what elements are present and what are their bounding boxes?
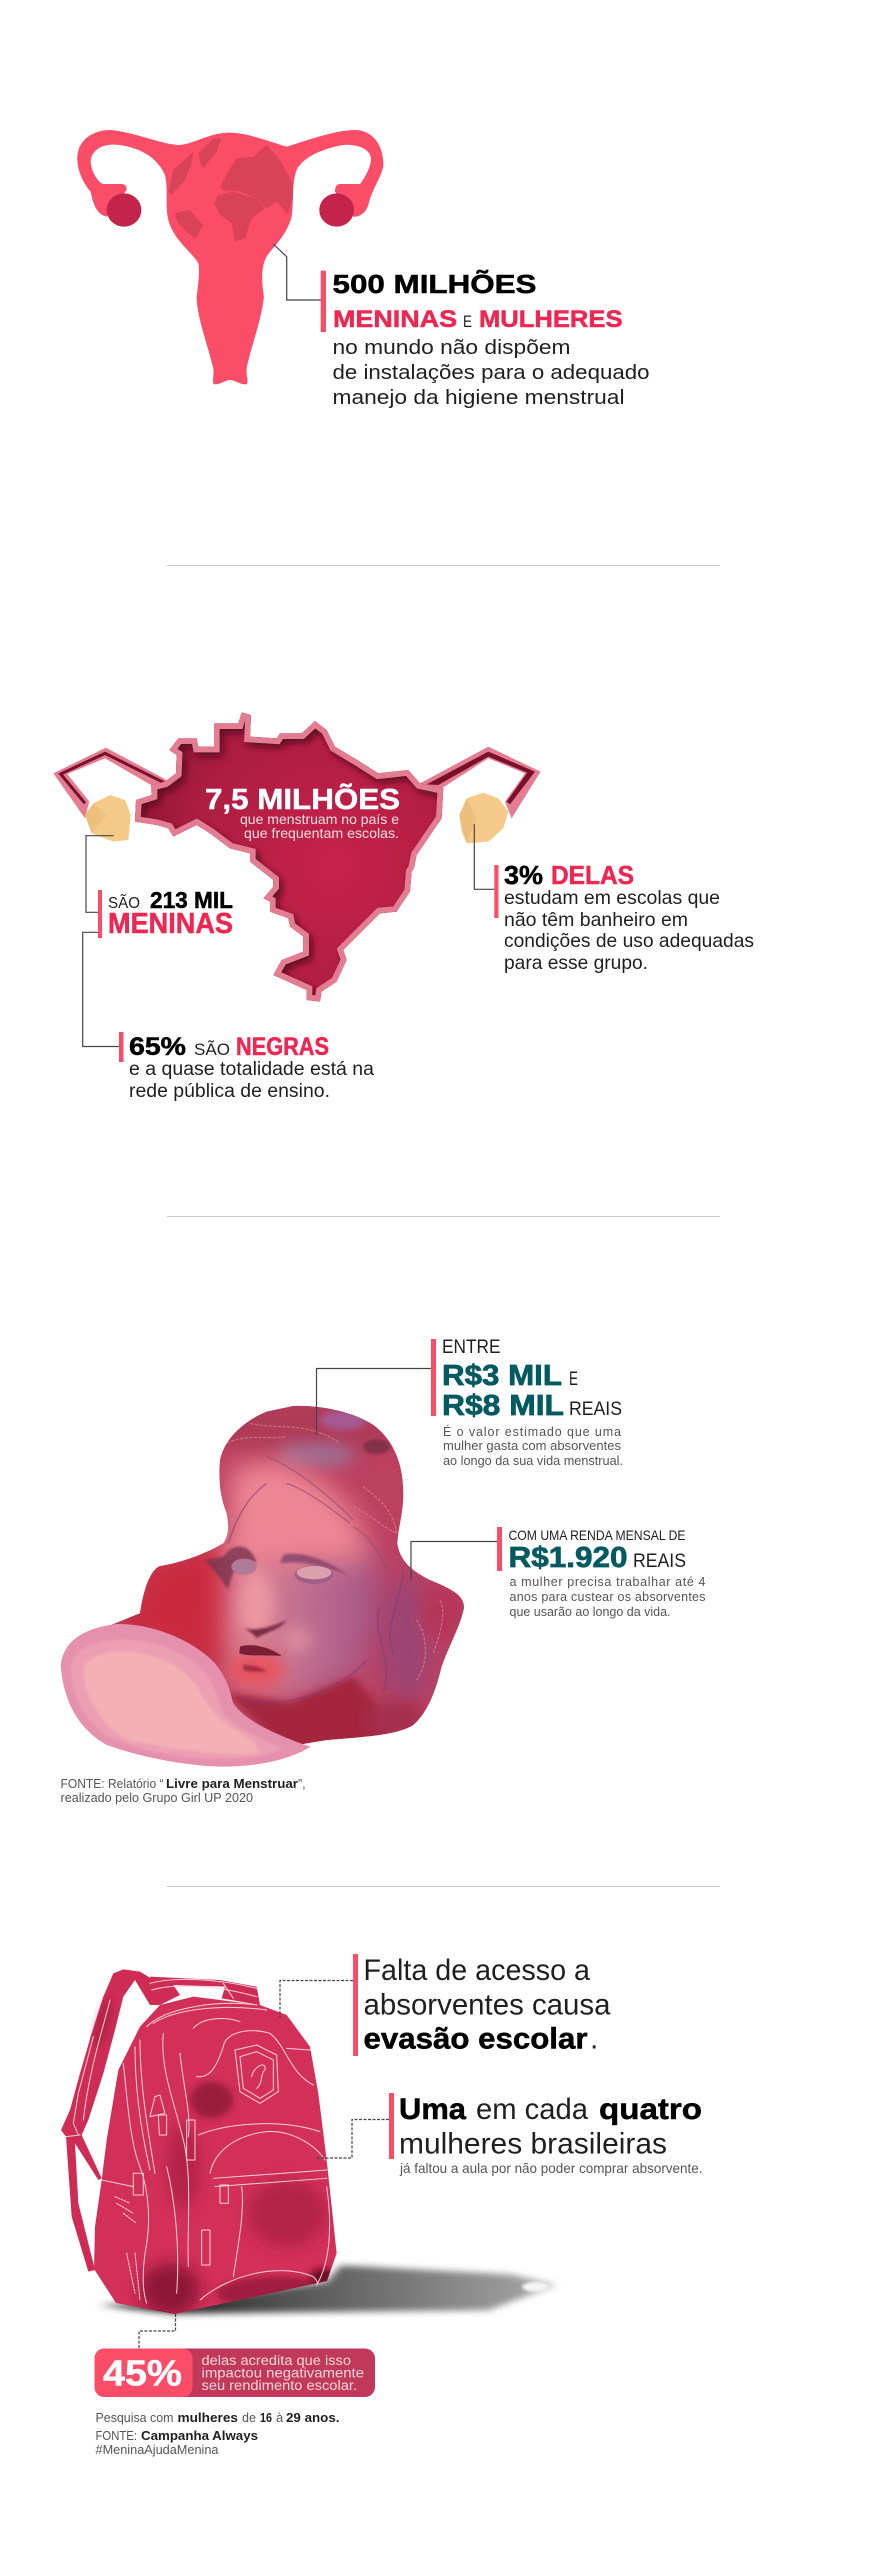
source note: FONTE: (96, 2428, 137, 2443)
callout: R$3 mil e R$8 mil: R$3 MIL (442, 1360, 562, 1392)
statement: evasão escolar: evasão escolar (364, 2022, 588, 2056)
statement: uma em cada quatro: já faltou a aula por não poder comprar absorvente. (399, 2160, 702, 2176)
panel: Brasil 7,5 milhões (53, 712, 754, 1102)
source note: 29 anos. (286, 2410, 340, 2425)
callout: R$3 mil e R$8 mil: REAIS (569, 1399, 622, 1420)
statement: evasão escolar (364, 1954, 611, 2056)
heading: meninas e mulheres: MULHERES (479, 306, 622, 333)
source note: mulheres (178, 2410, 238, 2425)
source note (60, 1777, 306, 1805)
callout: 65% negras: 65% (129, 1033, 186, 1061)
source note: Livre para Menstruar (166, 1777, 298, 1791)
statement: evasão escolar: Falta de acesso a (364, 1954, 590, 1987)
callout: 3% delas: estudam em escolas que (504, 887, 720, 909)
statement: uma em cada quatro: mulheres brasileiras (399, 2128, 667, 2160)
callout: 65% negras: rede pública de ensino. (129, 1081, 330, 1102)
illustration: backpack shadow (98, 2265, 556, 2314)
text block: no mundo: manejo da higiene menstrual (332, 387, 624, 409)
text: que menstruam: que frequentam escolas. (244, 825, 399, 841)
accent bar (389, 2093, 394, 2159)
callout: 213 mil meninas (108, 887, 233, 940)
text block: no mundo: de instalações para o adequado (332, 362, 650, 384)
illustration: banknote bust (107, 1400, 473, 1750)
callout: R$3 mil e R$8 mil (442, 1337, 623, 1468)
callout: R$3 mil e R$8 mil: É o valor estimado que uma (443, 1424, 621, 1439)
callout: 3% delas: condições de uso adequadas (504, 930, 754, 952)
connector lines left (83, 836, 119, 1046)
callout: 45%: seu rendimento escolar. (202, 2378, 357, 2393)
statement: uma em cada quatro: Uma (399, 2093, 466, 2126)
connector dashed lines (139, 1980, 389, 2348)
heading: 500 milhões: 500 MILHÕES (332, 269, 536, 299)
panel: custo dos absorventes (60, 1337, 706, 1805)
accent bar (353, 1954, 358, 2056)
callout: R$1.920 (508, 1527, 706, 1619)
callout: 45%: delas acredita que isso (202, 2353, 351, 2368)
connector line right (411, 1542, 497, 1580)
callout: 213 mil meninas: MENINAS (108, 908, 233, 940)
accent bar (321, 271, 326, 332)
accent bar (494, 865, 498, 918)
callout: 45%: 45% (103, 2352, 182, 2394)
illustration: Brazil map as uterus (53, 712, 541, 1006)
callout: 213 mil meninas: SÃO (108, 892, 140, 912)
callout: R$3 mil e R$8 mil: mulher gasta com absorventes (443, 1439, 621, 1453)
connector line top (316, 1368, 431, 1435)
accent bar (497, 1527, 502, 1571)
panel: 500 milhões (77, 130, 650, 409)
callout: 45% (94, 2348, 375, 2397)
text: que menstruam (240, 811, 399, 841)
text block: no mundo: no mundo não dispõem (332, 337, 570, 359)
heading: meninas e mulheres (333, 306, 622, 333)
callout: R$3 mil e R$8 mil: E (569, 1369, 578, 1390)
source note: Campanha Always (141, 2428, 258, 2443)
accent bar (98, 890, 102, 938)
callout: 45%: impactou negativamente (202, 2366, 364, 2381)
source note: Pesquisa com (96, 2410, 174, 2425)
callout: R$1.920: que usarão ao longo da vida. (510, 1605, 670, 1619)
source note (96, 2410, 340, 2457)
statement: evasão escolar: . (590, 2022, 598, 2056)
callout: 3% delas (504, 860, 754, 974)
callout: 3% delas: para esse grupo. (504, 952, 648, 974)
callout: R$1.920: R$1.920 (508, 1542, 628, 1574)
callout: 213 mil meninas: 213 MIL (150, 887, 233, 913)
icon: sanitary pad (61, 1624, 311, 1767)
callout: R$1.920: REAIS (633, 1551, 686, 1572)
icon: uterus with world map (77, 130, 383, 384)
connector line (273, 244, 321, 300)
illustration: backpack (61, 1969, 337, 2317)
accent bar (119, 1032, 124, 1062)
statement: uma em cada quatro: quatro (599, 2093, 702, 2126)
callout: R$1.920: a mulher precisa trabalhar até 4 (510, 1575, 706, 1589)
callout: 3% delas: 3% (504, 860, 543, 890)
callout: 65% negras (129, 1033, 374, 1102)
callout: 3% delas: DELAS (551, 860, 634, 890)
accent bar (431, 1339, 436, 1416)
heading: 7,5 milhões: 7,5 MILHÕES (205, 782, 400, 816)
callout: 65% negras: SÃO (194, 1040, 230, 1059)
callout: R$1.920: COM UMA RENDA MENSAL DE (508, 1527, 686, 1543)
panel: evasão escolar (61, 1954, 703, 2457)
text: que menstruam: que menstruam no país e (240, 811, 399, 827)
source note: FONTE: Relatório “ (60, 1777, 164, 1791)
statement: uma em cada quatro: em cada (476, 2093, 588, 2126)
text block: no mundo (332, 337, 650, 409)
statement: evasão escolar: absorventes causa (364, 1988, 611, 2022)
source note: realizado pelo Grupo Girl UP 2020 (60, 1791, 253, 1805)
source note: ”, (298, 1777, 306, 1791)
callout: R$3 mil e R$8 mil: ao longo da sua vida menstrual. (443, 1454, 623, 1468)
source note: de (242, 2410, 256, 2425)
callout: R$1.920: anos para custear os absorventes (510, 1590, 706, 1604)
callout: R$3 mil e R$8 mil: ENTRE (442, 1337, 500, 1358)
source note: à (276, 2410, 284, 2425)
heading: meninas e mulheres: MENINAS (333, 306, 457, 333)
source note: #MeninaAjudaMenina (96, 2442, 219, 2457)
connector line right (474, 824, 494, 889)
callout: 65% negras: e a quase totalidade está na (129, 1059, 374, 1080)
callout: 65% negras: NEGRAS (236, 1033, 329, 1061)
statement: uma em cada quatro (399, 2093, 702, 2176)
source note: 16 (260, 2410, 272, 2425)
heading: meninas e mulheres: E (463, 312, 472, 331)
callout: 3% delas: não têm banheiro em (504, 909, 688, 931)
callout: R$3 mil e R$8 mil: R$8 MIL (442, 1390, 564, 1422)
